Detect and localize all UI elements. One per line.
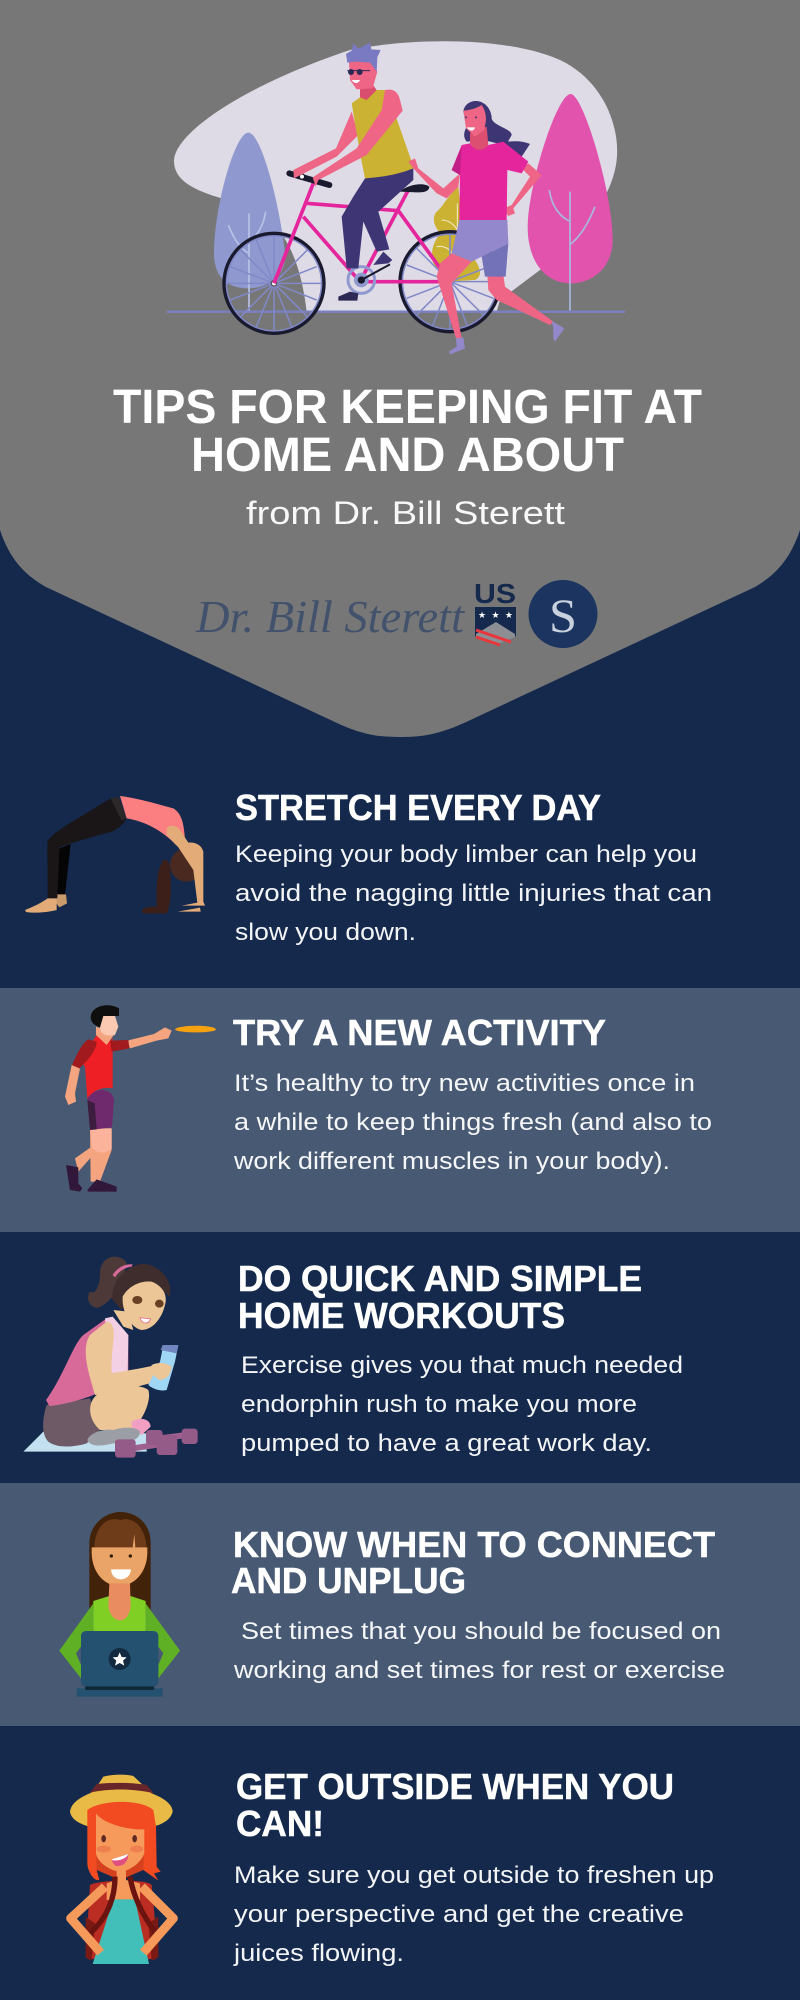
logo: US shield (474, 578, 516, 645)
body text: a while to keep things fresh (and also to (234, 1109, 712, 1136)
heading: AND UNPLUG (231, 1560, 466, 1601)
body text: working and set times for rest or exercise (233, 1657, 725, 1684)
body text (233, 1862, 714, 1967)
heading (231, 1524, 715, 1601)
body text: your perspective and get the creative (234, 1901, 684, 1928)
body text (233, 1070, 712, 1175)
logo: US shield: US (474, 578, 516, 609)
heading: GET OUTSIDE WHEN YOU (236, 1766, 674, 1807)
heading: STRETCH EVERY DAY (235, 787, 601, 828)
panel: know when to connect and unplug (0, 1483, 800, 1726)
heading: TRY A NEW ACTIVITY (233, 1012, 606, 1053)
body text: slow you down. (235, 919, 416, 946)
illustration: couple cycling and running in a park (167, 41, 625, 354)
logo: skier emblem (528, 580, 598, 648)
panel: do quick and simple home workouts (23, 1257, 683, 1458)
logo: Dr. Bill Sterett signature: Dr. Bill Sterett (195, 591, 465, 642)
body text (233, 1618, 725, 1684)
icon: woman in hat with backpack (70, 1775, 173, 1964)
body text: pumped to have a great work day. (241, 1430, 652, 1457)
body text (241, 1352, 683, 1457)
body text: work different muscles in your body). (233, 1148, 670, 1175)
icon: smiling woman with laptop (59, 1512, 180, 1697)
body text: Exercise gives you that much needed (241, 1352, 683, 1379)
subtitle: from Dr. Bill Sterett (246, 495, 565, 531)
logo: skier emblem: S (549, 590, 577, 643)
panel: header (0, 0, 800, 737)
icon: man throwing frisbee (65, 1005, 216, 1192)
body text: Set times that you should be focused on (241, 1618, 721, 1645)
body text: avoid the nagging little injuries that can (235, 880, 712, 907)
heading: CAN! (236, 1803, 324, 1844)
panel: stretch every day (25, 787, 712, 946)
title (113, 381, 702, 482)
body text (235, 841, 712, 946)
body text: endorphin rush to make you more (241, 1391, 637, 1418)
panel: get outside when you can (70, 1766, 714, 1967)
icon: woman with water bottle and dumbbells (23, 1257, 198, 1458)
title: HOME AND ABOUT (191, 429, 624, 482)
logo: US shield: ★★★ (478, 610, 513, 620)
heading: HOME WORKOUTS (238, 1295, 565, 1336)
title: TIPS FOR KEEPING FIT AT (113, 381, 702, 434)
panel: try a new activity (0, 988, 800, 1232)
heading (236, 1766, 674, 1844)
body text: Keeping your body limber can help you (235, 841, 697, 868)
heading: DO QUICK AND SIMPLE (238, 1258, 642, 1299)
heading (238, 1258, 642, 1336)
icon: woman in bridge pose (25, 796, 205, 913)
body text: Make sure you get outside to freshen up (234, 1862, 714, 1889)
body text: juices flowing. (233, 1940, 404, 1967)
body text: It’s healthy to try new activities once in (234, 1070, 695, 1097)
heading: KNOW WHEN TO CONNECT (233, 1524, 715, 1565)
